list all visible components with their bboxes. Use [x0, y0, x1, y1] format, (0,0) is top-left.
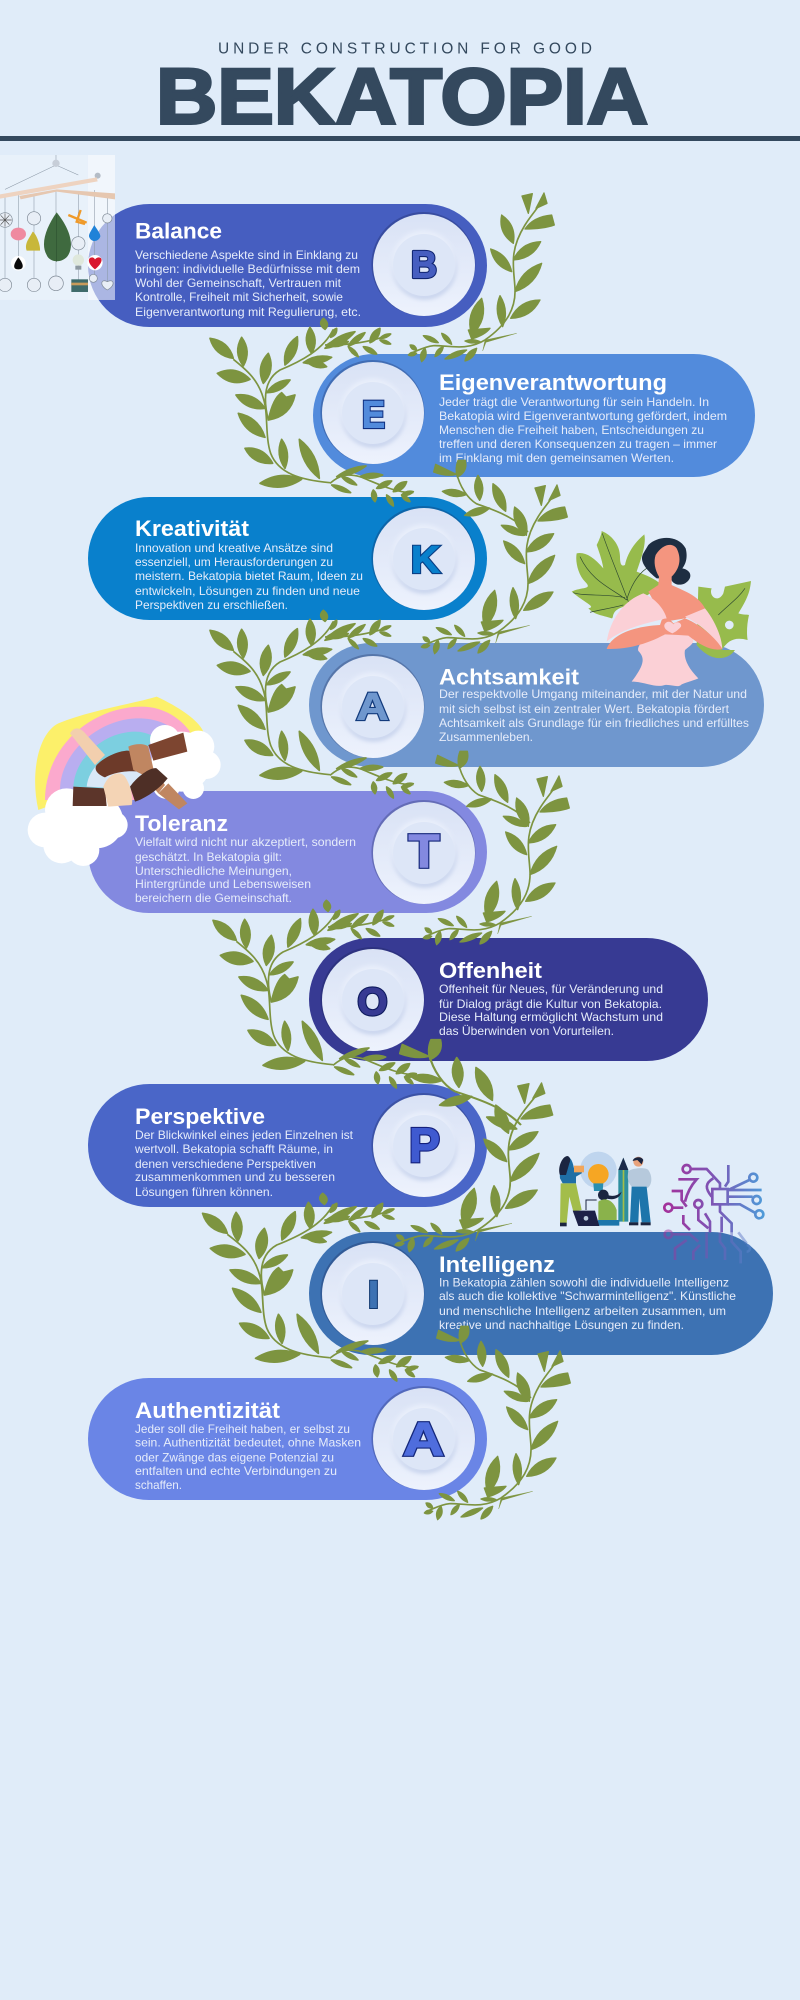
body text: Intelligenz: und menschliche Intelligenz arbeiten zusammen, um	[439, 1304, 726, 1318]
body text: Kreativität: essenziell, um Herausforderungen zu	[135, 555, 333, 569]
body text: Perspektive: Der Blickwinkel eines jeden Einzelnen ist	[135, 1128, 354, 1142]
icon: P plate	[371, 1093, 475, 1197]
body text: Intelligenz: kreative und nachhaltige Lösungen zu finden.	[439, 1318, 684, 1332]
body text: Balance: Verschiedene Aspekte sind in Einklang zu	[135, 248, 358, 262]
body text: Balance: bringen: individuelle Bedürfnisse mit dem	[135, 262, 360, 276]
illustration: rainbow with joined hands	[28, 697, 221, 866]
body text: Offenheit: Diese Haltung ermöglicht Wachstum und	[439, 1010, 663, 1024]
illustration: AI circuit brain	[664, 1165, 763, 1263]
pill: Achtsamkeit	[309, 643, 764, 767]
heading: Kreativität: Kreativität	[135, 516, 250, 541]
body text: Kreativität: Innovation und kreative Ansätze sind	[135, 541, 333, 555]
title: BEKATOPIA	[156, 52, 648, 140]
letter A: A	[403, 1412, 444, 1466]
letter I: I	[368, 1274, 379, 1316]
body text: Intelligenz	[439, 1276, 736, 1332]
body text: Intelligenz: In Bekatopia zählen sowohl die individuelle Intelligenz	[439, 1276, 729, 1290]
body text: Toleranz	[135, 835, 356, 905]
body text: Kreativität: entwickeln, Lösungen zu finden und neue	[135, 584, 360, 598]
icon: O plate	[320, 947, 424, 1051]
icon: A plate	[320, 654, 424, 758]
body text: Kreativität: Perspektiven zu erschließen.	[135, 598, 288, 612]
body text: Balance: Wohl der Gemeinschaft, Vertrauen mit	[135, 276, 342, 290]
vine: left 1	[210, 318, 413, 506]
panel: Offenheit	[309, 938, 708, 1061]
pill: Eigenverantwortung	[313, 354, 755, 477]
illustration: woman with monstera leaves	[572, 531, 751, 686]
body text: Eigenverantwortung: Jeder trägt die Verantwortung für sein Handeln. In	[439, 395, 709, 409]
heading: Perspektive: Perspektive	[135, 1104, 265, 1129]
heading: Toleranz: Toleranz	[135, 811, 228, 836]
letter K: K	[411, 540, 441, 582]
body text: Eigenverantwortung	[439, 395, 727, 465]
body text: Perspektive: denen verschiedene Perspektiven	[135, 1157, 316, 1171]
body text: Perspektive: wertvoll. Bekatopia schafft Räume, in	[134, 1142, 333, 1156]
panel: Kreativität	[88, 497, 487, 620]
heading: Offenheit: Offenheit	[439, 958, 543, 983]
heading: Balance: Balance	[135, 218, 222, 244]
letter T: T	[408, 824, 440, 878]
letter K: K	[411, 540, 441, 582]
pill: Intelligenz	[309, 1232, 773, 1355]
vine: right 5	[424, 1326, 570, 1520]
body text: Balance: Eigenverantwortung mit Regulierung, etc.	[135, 305, 361, 319]
body text: Authentizität: oder Zwänge das eigene Potenzial zu	[135, 1450, 334, 1464]
panel: Achtsamkeit	[309, 643, 764, 767]
vine: left 4	[203, 1193, 418, 1381]
body text: Eigenverantwortung: treffen und deren Konsequenzen zu tragen – immer	[439, 437, 717, 451]
body text: Perspektive: zusammenkommen und zu besseren	[135, 1170, 335, 1184]
body text: Kreativität: meistern. Bekatopia bietet Raum, Ideen zu	[135, 569, 363, 583]
body text: Offenheit: Offenheit für Neues, für Veränderung und	[439, 982, 663, 996]
letter T: T	[408, 824, 440, 878]
body text: Perspektive: Lösungen führen können.	[135, 1185, 273, 1199]
body text: Balance: Kontrolle, Freiheit mit Sicherheit, sowie	[135, 290, 343, 304]
panel: Perspektive	[88, 1084, 487, 1207]
letter O: O	[358, 982, 388, 1024]
pill: Kreativität	[88, 497, 487, 620]
body text: Toleranz: Unterschiedliche Meinungen,	[135, 864, 292, 878]
pill: Balance	[88, 204, 487, 327]
panel: Intelligenz	[309, 1232, 773, 1355]
icon: T plate	[371, 800, 475, 904]
letter B: B	[411, 244, 437, 286]
panel: Eigenverantwortung	[313, 354, 755, 477]
body text: Authentizität	[135, 1422, 361, 1492]
body text: Achtsamkeit: Achtsamkeit als Grundlage für ein friedliches und erfülltes	[439, 716, 749, 730]
letter O: O	[358, 982, 388, 1024]
body text: Achtsamkeit: Zusammenleben.	[439, 730, 533, 744]
vine: left 3	[213, 900, 416, 1088]
pill: Toleranz	[88, 791, 487, 913]
body text: Kreativität	[135, 541, 363, 612]
icon: K plate	[371, 506, 475, 610]
body text: Achtsamkeit: mit sich selbst ist ein zentraler Wert. Bekatopia fördert	[439, 702, 730, 716]
panel: Authentizität	[88, 1378, 487, 1500]
body text: Achtsamkeit	[439, 687, 749, 744]
body text: Eigenverantwortung: Menschen die Freiheit haben, Entscheidungen zu	[439, 423, 704, 437]
letter E: E	[362, 394, 385, 436]
body text: Authentizität: schaffen.	[135, 1478, 182, 1492]
letter I: I	[368, 1274, 379, 1316]
body text: Intelligenz: als auch die kollektive "Schwarmintelligenz". Künstliche	[439, 1289, 736, 1303]
body text: Toleranz: Hintergründe und Lebensweisen	[135, 877, 311, 891]
panel: Toleranz	[88, 791, 487, 913]
header rule	[0, 136, 800, 141]
body text: Eigenverantwortung: Bekatopia wird Eigenverantwortung gefördert, indem	[439, 409, 727, 423]
vine: left 2	[210, 610, 413, 798]
subtitle: UNDER CONSTRUCTION FOR GOOD	[218, 40, 592, 58]
illustration: team with lightbulb	[559, 1152, 651, 1226]
letter P: P	[409, 1120, 440, 1172]
body text: Authentizität: Jeder soll die Freiheit haben, er selbst zu	[135, 1422, 350, 1436]
letter B: B	[411, 244, 437, 286]
icon: A plate	[371, 1386, 475, 1490]
body text: Offenheit	[439, 982, 663, 1038]
body text: Balance	[135, 248, 361, 319]
body text: Achtsamkeit: Der respektvolle Umgang miteinander, mit der Natur und	[439, 687, 747, 701]
body text: Authentizität: sein. Authentizität bedeutet, ohne Masken	[135, 1436, 361, 1450]
letter P: P	[409, 1120, 440, 1172]
body text: Perspektive	[134, 1128, 354, 1199]
panel: Balance	[88, 204, 487, 327]
icon: E plate	[320, 360, 424, 464]
body text: Offenheit: für Dialog prägt die Kultur von Bekatopia.	[439, 997, 662, 1011]
letter A: A	[356, 686, 388, 728]
letter A: A	[356, 686, 388, 728]
vine: right 4	[395, 1040, 553, 1252]
heading: Eigenverantwortung: Eigenverantwortung	[439, 370, 667, 395]
icon: I plate	[320, 1241, 424, 1345]
heading: Authentizität: Authentizität	[135, 1398, 281, 1423]
icon: B plate	[371, 212, 475, 316]
body text: Authentizität: entfalten und echte Verbindungen zu	[135, 1464, 337, 1478]
vine: right 1	[408, 193, 554, 362]
body text: Toleranz: Vielfalt wird nicht nur akzeptiert, sondern	[135, 835, 356, 849]
pill: Authentizität	[88, 1378, 487, 1500]
heading: Intelligenz: Intelligenz	[439, 1252, 555, 1277]
vine: right 2	[421, 460, 567, 654]
body text: Toleranz: bereichern die Gemeinschaft.	[135, 891, 292, 905]
illustration: hanging balance mobile	[0, 155, 115, 300]
letter A: A	[403, 1412, 444, 1466]
pill: Perspektive	[88, 1084, 487, 1207]
body text: Eigenverantwortung: im Einklang mit den gemeinsamen Werten.	[439, 451, 674, 465]
letter E: E	[362, 394, 385, 436]
heading: Achtsamkeit: Achtsamkeit	[439, 664, 580, 690]
body text: Offenheit: das Überwinden von Vorurteilen.	[439, 1024, 614, 1038]
pill: Offenheit	[309, 938, 708, 1061]
vine: right 3	[423, 751, 569, 945]
body text: Toleranz: geschätzt. In Bekatopia gilt:	[135, 850, 282, 864]
